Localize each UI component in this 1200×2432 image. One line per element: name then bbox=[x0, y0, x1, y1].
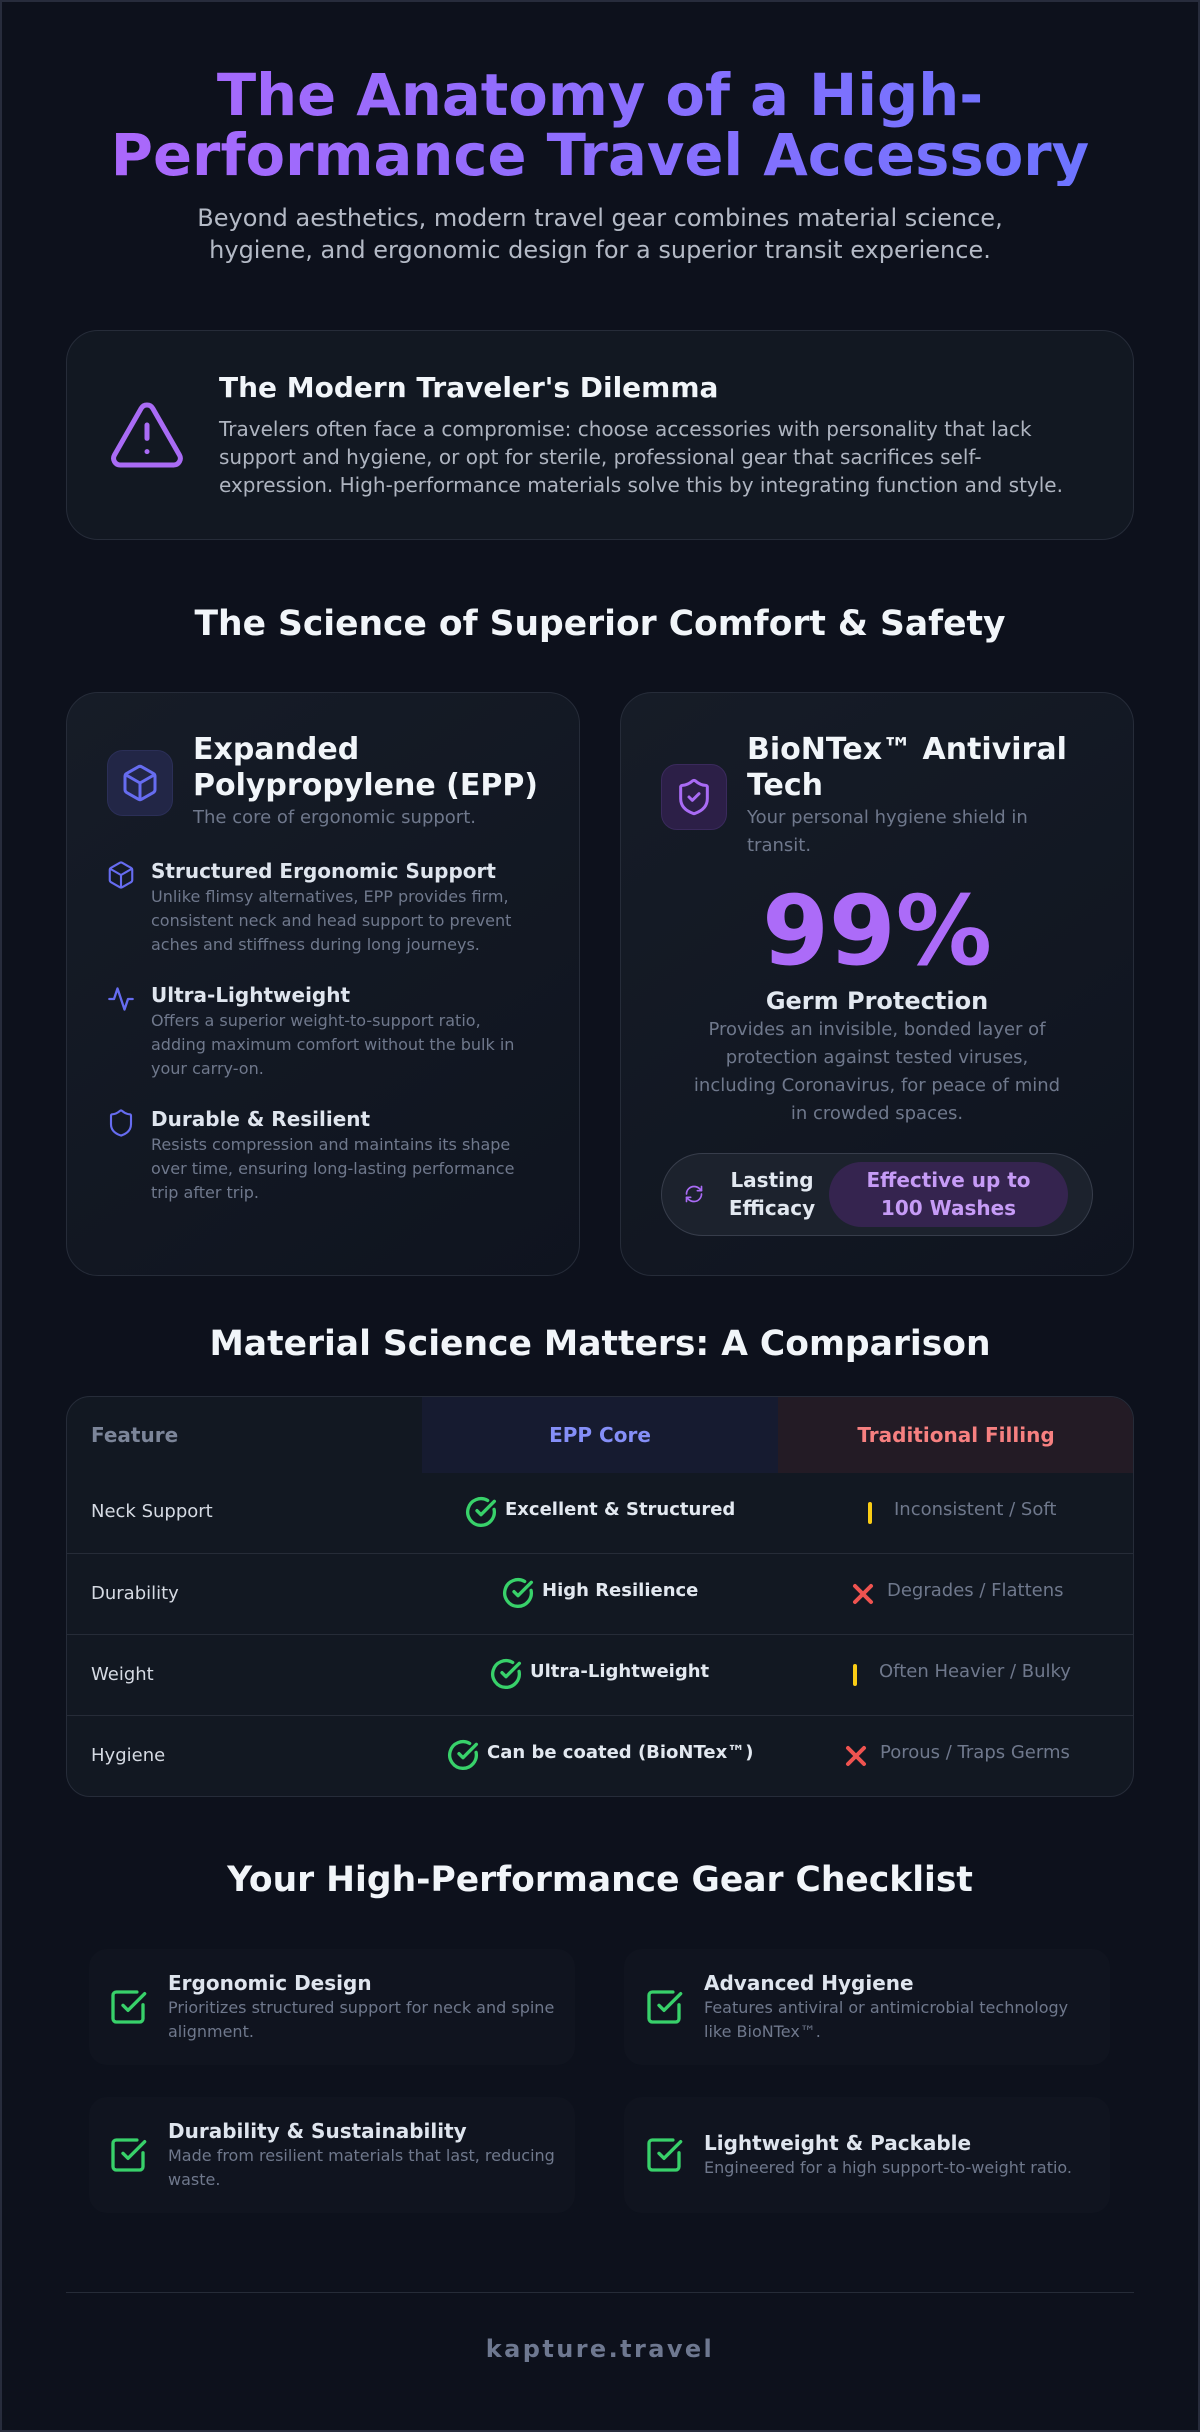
panel: BioNTex antiviral tech bbox=[620, 692, 1134, 1276]
icon: cube bbox=[108, 861, 134, 889]
icon: check bbox=[490, 1658, 522, 1689]
icon: cross bbox=[846, 1746, 866, 1766]
subtitle: hygiene, and ergonomic design for a superior transit experience. bbox=[209, 236, 991, 264]
checklist item: durability and sustainability bbox=[89, 2097, 575, 2213]
feature text: Resists compression and maintains its shape bbox=[151, 1135, 510, 1154]
feature heading: Durable & Resilient bbox=[151, 1107, 370, 1131]
feature text: Offers a superior weight-to-support ratio, bbox=[151, 1011, 481, 1030]
efficacy label bbox=[729, 1168, 815, 1220]
stat: 99 percent: 99% bbox=[762, 875, 992, 987]
EPP heading bbox=[193, 732, 538, 803]
BioNTex heading bbox=[747, 732, 1067, 803]
subtitle: Beyond aesthetics, modern travel gear combines material science, bbox=[197, 204, 1003, 232]
BioNTex heading: BioNTex™ Antiviral bbox=[747, 732, 1067, 767]
checklist item: advanced hygiene bbox=[624, 1949, 1110, 2065]
checklist item: ergonomic design bbox=[89, 1949, 575, 2065]
icon: refresh bbox=[686, 1186, 702, 1202]
feature text: aches and stiffness during long journeys. bbox=[151, 935, 480, 954]
column header: feature: Feature bbox=[91, 1423, 178, 1447]
feature text bbox=[151, 1135, 514, 1202]
feature text: trip after trip. bbox=[151, 1183, 259, 1202]
feature text: your carry-on. bbox=[151, 1059, 264, 1078]
traditional value: Porous / Traps Germs bbox=[880, 1742, 1070, 1763]
icon: activity pulse bbox=[108, 987, 134, 1011]
efficacy value badge: 100 Washes bbox=[881, 1196, 1016, 1220]
BioNTex subtitle: Your personal hygiene shield in bbox=[747, 807, 1028, 828]
item text bbox=[168, 2146, 555, 2189]
subtitle bbox=[197, 204, 1003, 264]
table header bbox=[91, 1397, 1133, 1473]
EPP heading: Expanded bbox=[193, 732, 359, 767]
icon: cross bbox=[852, 1584, 874, 1604]
title bbox=[66, 66, 1134, 186]
row label: Hygiene bbox=[91, 1745, 165, 1766]
column header: traditional filling bbox=[778, 1397, 1134, 1473]
item text: Features antiviral or antimicrobial technology bbox=[704, 1998, 1068, 2017]
dilemma text: Travelers often face a compromise: choose accessories with personality that lack bbox=[219, 417, 1032, 441]
item text bbox=[704, 1998, 1068, 2041]
traditional value: Inconsistent / Soft bbox=[894, 1499, 1056, 1520]
item heading: Ergonomic Design bbox=[168, 1971, 372, 1995]
row: durability bbox=[67, 1554, 1133, 1635]
icon: checked box bbox=[647, 1990, 682, 2024]
row: neck support bbox=[67, 1473, 1133, 1554]
stat description: Provides an invisible, bonded layer of bbox=[708, 1019, 1046, 1040]
item text: waste. bbox=[168, 2170, 220, 2189]
EPP heading: Polypropylene (EPP) bbox=[193, 768, 538, 803]
icon: caution bar bbox=[853, 1664, 857, 1686]
dilemma text: expression. High-performance materials solve this by integrating function and style. bbox=[219, 473, 1063, 497]
icon: warning triangle bbox=[111, 402, 183, 468]
icon: caution bar bbox=[868, 1502, 872, 1524]
column header: traditional filling: Traditional Filling bbox=[857, 1423, 1055, 1447]
feature text: Unlike flimsy alternatives, EPP provides firm, bbox=[151, 887, 509, 906]
traditional value: Often Heavier / Bulky bbox=[879, 1661, 1071, 1682]
row label: Neck Support bbox=[91, 1501, 213, 1522]
BioNTex heading: Tech bbox=[747, 768, 823, 803]
traditional value: Degrades / Flattens bbox=[887, 1580, 1064, 1601]
feature heading: Ultra-Lightweight bbox=[151, 983, 350, 1007]
icon: check bbox=[448, 1740, 478, 1770]
checklist item: lightweight and packable bbox=[624, 2097, 1110, 2213]
stat description: protection against tested viruses, bbox=[726, 1047, 1028, 1068]
feature: durable bbox=[110, 1107, 514, 1202]
efficacy label: Efficacy bbox=[729, 1196, 815, 1220]
row label: Weight bbox=[91, 1664, 154, 1685]
feature text bbox=[151, 887, 511, 954]
efficacy value badge bbox=[829, 1162, 1068, 1227]
BioNTex subtitle bbox=[747, 807, 1028, 856]
feature text bbox=[151, 1011, 514, 1078]
feature text: over time, ensuring long-lasting performance bbox=[151, 1159, 514, 1178]
item text: Made from resilient materials that last, reducing bbox=[168, 2146, 555, 2165]
stat description: in crowded spaces. bbox=[791, 1103, 963, 1124]
icon: check bbox=[466, 1496, 496, 1527]
row: hygiene bbox=[91, 1740, 1070, 1770]
panel: expanded polypropylene bbox=[66, 692, 580, 1276]
feature: ultra-lightweight bbox=[108, 983, 514, 1078]
efficacy value badge: Effective up to bbox=[866, 1168, 1031, 1192]
stat label: Germ Protection bbox=[766, 987, 988, 1015]
icon: checked box bbox=[647, 2138, 682, 2172]
title: Performance Travel Accessory bbox=[111, 122, 1089, 189]
efficacy label: Lasting bbox=[730, 1168, 814, 1192]
feature heading: Structured Ergonomic Support bbox=[151, 859, 496, 883]
EPP value: Ultra-Lightweight bbox=[530, 1661, 709, 1682]
item text: alignment. bbox=[168, 2022, 254, 2041]
feature text: adding maximum comfort without the bulk in bbox=[151, 1035, 514, 1054]
EPP subtitle: The core of ergonomic support. bbox=[193, 807, 476, 828]
icon: check bbox=[502, 1578, 534, 1608]
item text: like BioNTex™. bbox=[704, 2022, 821, 2041]
icon: shield check in tile bbox=[661, 764, 727, 830]
efficacy pill bbox=[661, 1153, 1093, 1236]
row: weight bbox=[67, 1635, 1133, 1716]
icon: cube in tile bbox=[107, 750, 173, 816]
column header: EPP core bbox=[422, 1397, 778, 1473]
stat description bbox=[694, 1019, 1060, 1124]
heading: comparison section: Material Science Matters: A Comparison bbox=[209, 1324, 991, 1364]
icon: checked box bbox=[111, 2138, 146, 2172]
heading: checklist section: Your High-Performance Gear Checklist bbox=[227, 1860, 973, 1900]
icon: checked box bbox=[111, 1990, 146, 2024]
column header: EPP core: EPP Core bbox=[549, 1423, 651, 1447]
item text: Engineered for a high support-to-weight ratio. bbox=[704, 2158, 1072, 2177]
BioNTex subtitle: transit. bbox=[747, 835, 811, 856]
footer brand: kapture.travel bbox=[486, 2335, 714, 2363]
icon: shield bbox=[110, 1109, 132, 1137]
stat description: including Coronavirus, for peace of mind bbox=[694, 1075, 1060, 1096]
EPP value: Excellent & Structured bbox=[505, 1499, 735, 1520]
EPP value: High Resilience bbox=[542, 1580, 698, 1601]
feature: structured support bbox=[108, 859, 511, 954]
item heading: Advanced Hygiene bbox=[704, 1971, 914, 1995]
title: The Anatomy of a High- bbox=[217, 62, 983, 129]
panel: the modern traveler's dilemma bbox=[66, 330, 1134, 540]
heading: science section: The Science of Superior Comfort & Safety bbox=[194, 604, 1006, 644]
item heading: Lightweight & Packable bbox=[704, 2131, 971, 2155]
EPP value: Can be coated (BioNTex™) bbox=[487, 1742, 753, 1763]
item heading: Durability & Sustainability bbox=[168, 2119, 467, 2143]
row label: Durability bbox=[91, 1583, 179, 1604]
dilemma text: support and hygiene, or opt for sterile, professional gear that sacrifices self- bbox=[219, 445, 982, 469]
comparison table bbox=[66, 1396, 1134, 1797]
item text: Prioritizes structured support for neck and spine bbox=[168, 1998, 554, 2017]
feature text: consistent neck and head support to prevent bbox=[151, 911, 511, 930]
item text bbox=[168, 1998, 554, 2041]
dilemma heading: The Modern Traveler's Dilemma bbox=[219, 371, 718, 404]
dilemma text bbox=[218, 417, 1063, 497]
